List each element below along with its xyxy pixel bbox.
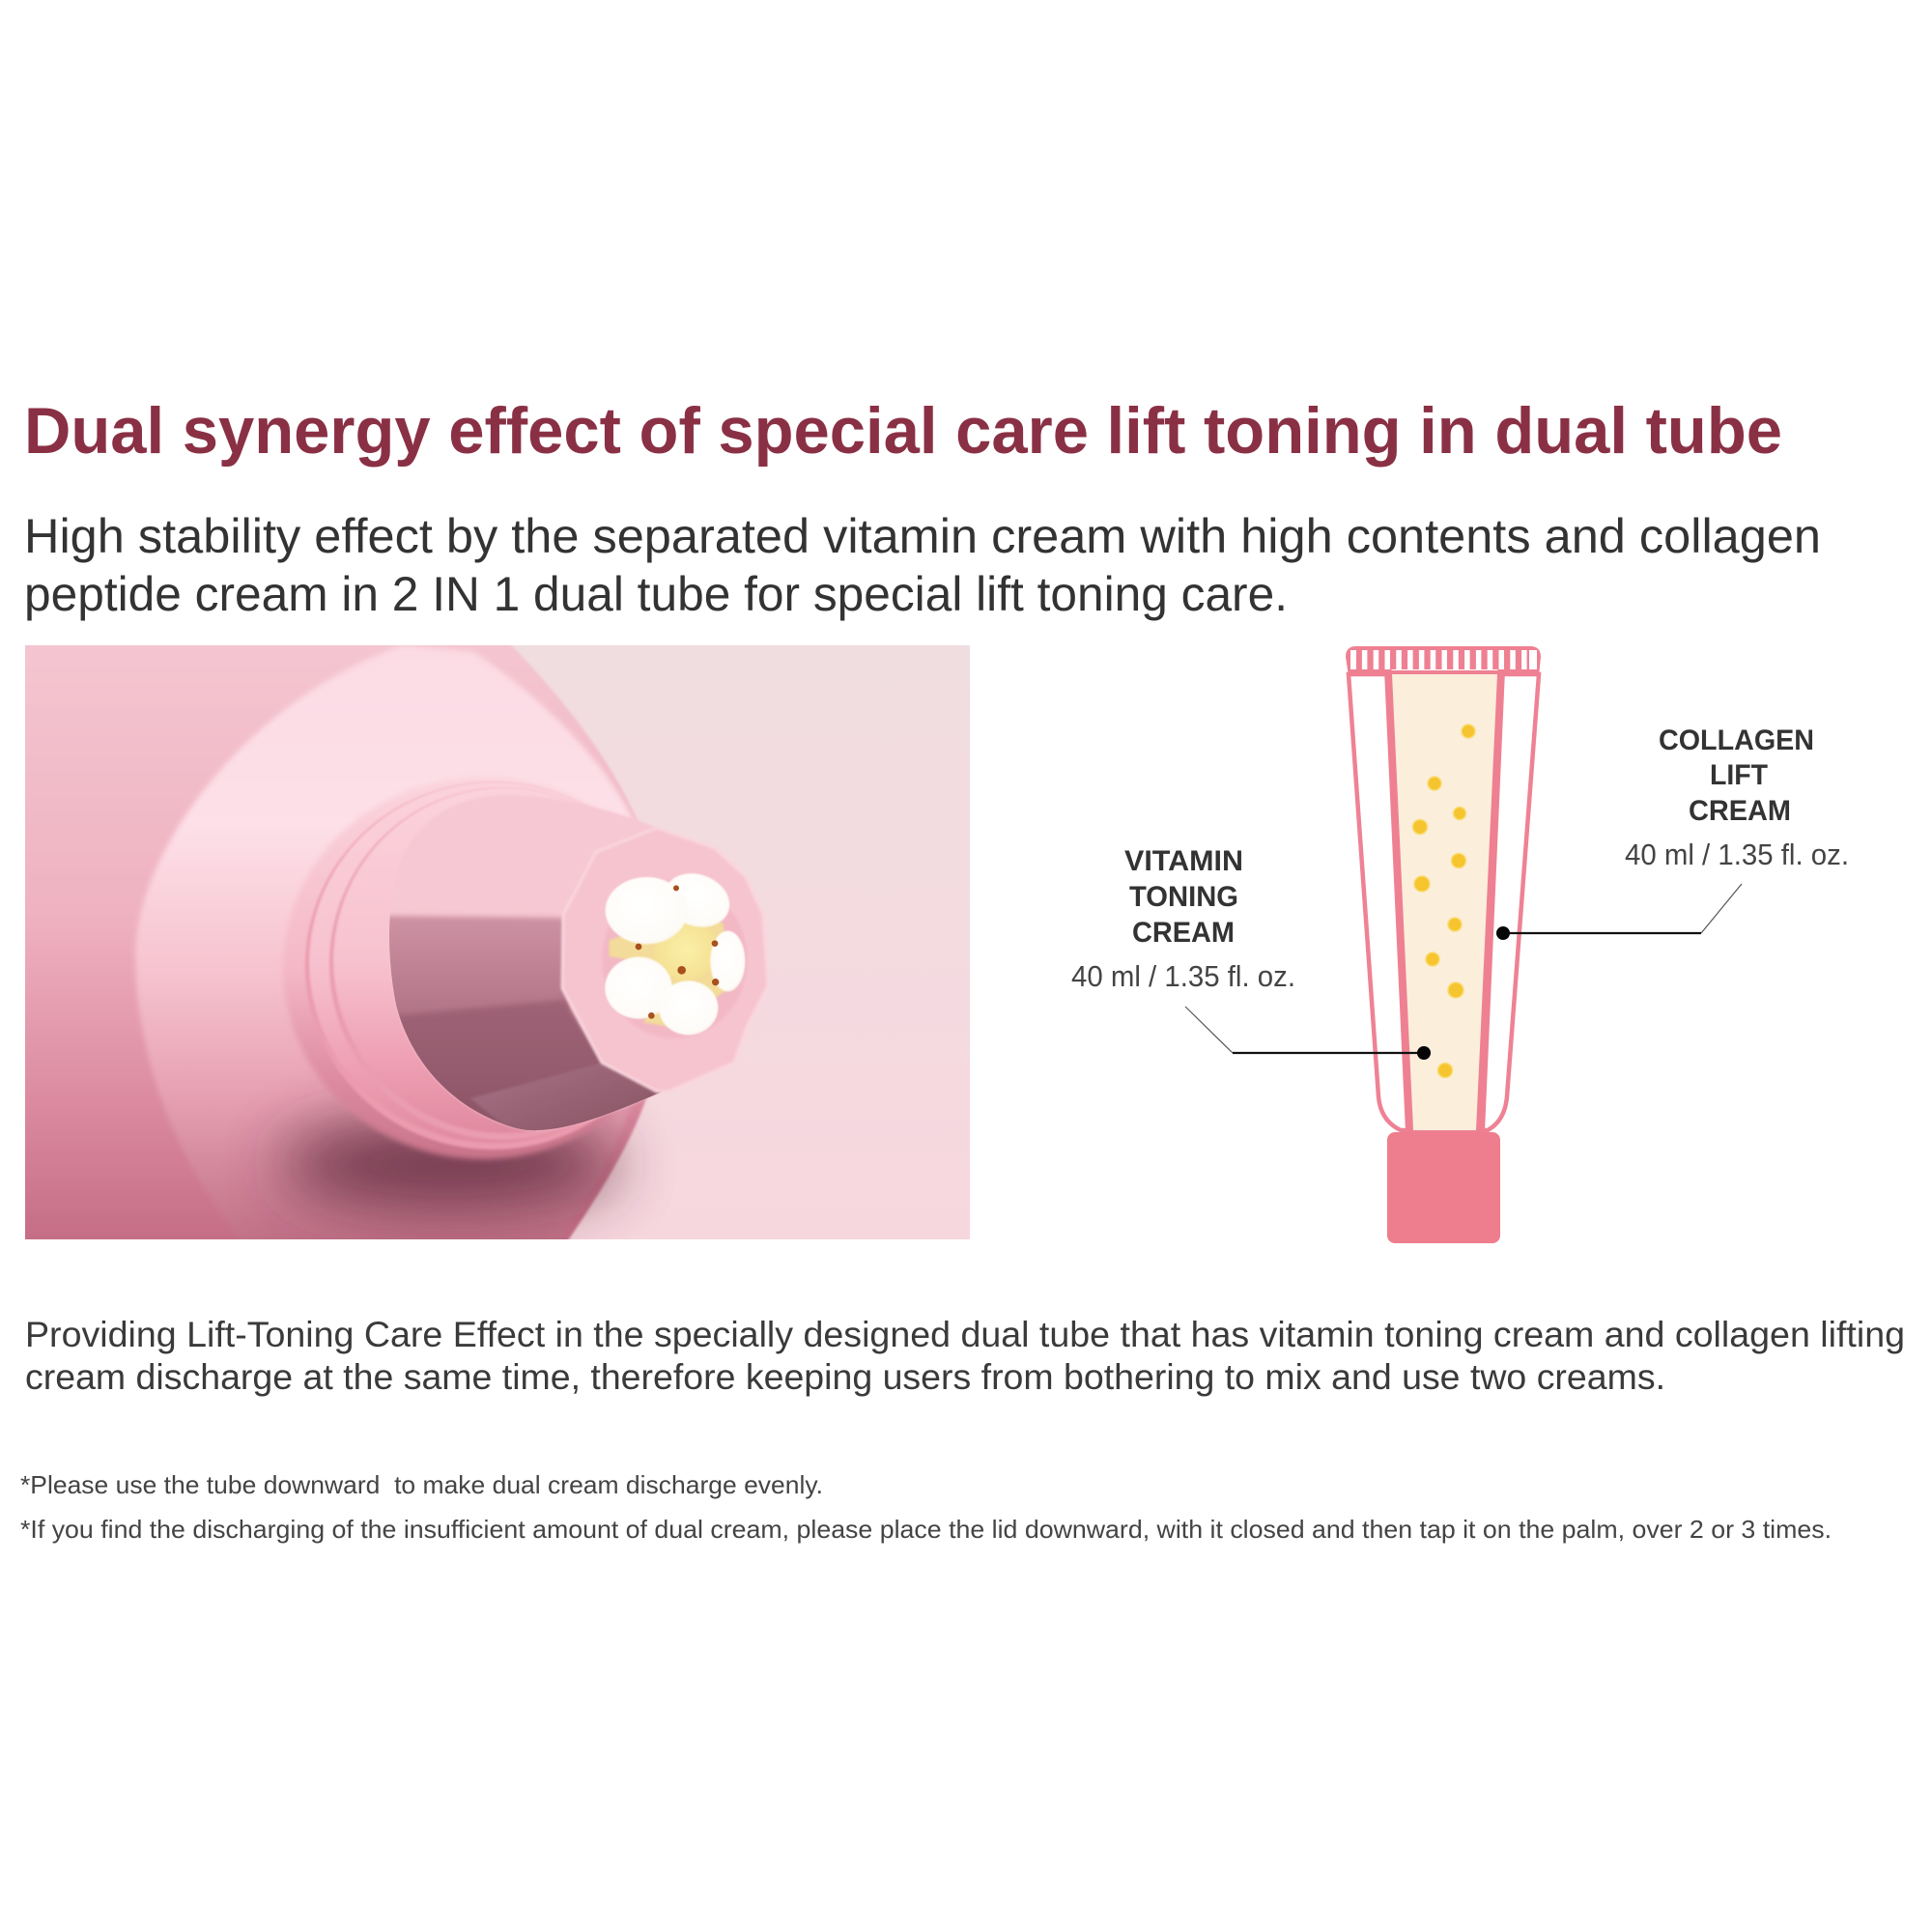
footnotes <box>20 1470 1832 1544</box>
leader: vitamin toning cream <box>1185 1007 1431 1060</box>
ridges around nozzle <box>284 779 611 1163</box>
label: collagen lift cream: COLLAGEN <box>1659 724 1814 756</box>
outer disc <box>19 638 653 1246</box>
label: vitamin toning cream: CREAM <box>1132 917 1235 949</box>
label: vitamin toning cream <box>1071 845 1295 993</box>
tube cap <box>1387 1132 1500 1243</box>
subheading: peptide cream in 2 IN 1 dual tube for special lift toning care. <box>24 567 1288 621</box>
inner disc <box>135 645 639 1246</box>
body paragraph: cream discharge at the same time, therefore keeping users from bothering to mix and use two creams. <box>25 1357 1665 1397</box>
vitamin beads <box>1412 724 1475 1078</box>
label: collagen lift cream: LIFT <box>1710 759 1768 791</box>
label: collagen lift cream: 40 ml / 1.35 fl. oz. <box>1625 838 1849 871</box>
footnotes: *If you find the discharging of the insufficient amount of dual cream, please place the lid downward, with it closed and then tap it on the palm, over 2 or 3 times. <box>20 1515 1832 1544</box>
subheading <box>24 509 1821 621</box>
icon: cream flower at nozzle tip <box>602 865 747 1038</box>
leader: collagen lift cream <box>1496 884 1742 940</box>
tube outer body <box>1349 674 1539 1130</box>
photo: tube nozzle close-up <box>25 645 970 1239</box>
title: Dual synergy effect of special care lift toning in dual tube <box>24 394 1782 468</box>
inner cream chamber <box>1384 670 1505 1132</box>
subheading: High stability effect by the separated vitamin cream with high contents and collagen <box>24 509 1821 563</box>
tube crimp end <box>1346 646 1541 676</box>
label: vitamin toning cream: 40 ml / 1.35 fl. oz. <box>1071 959 1295 993</box>
label: vitamin toning cream: TONING <box>1129 881 1238 913</box>
label: collagen lift cream <box>1625 724 1849 871</box>
body paragraph <box>25 1315 1905 1397</box>
label: vitamin toning cream: VITAMIN <box>1124 845 1243 877</box>
body paragraph: Providing Lift-Toning Care Effect in the specially designed dual tube that has vitamin toning cream and collagen lifting <box>25 1315 1905 1354</box>
nozzle body <box>382 795 671 1140</box>
label: collagen lift cream: CREAM <box>1689 795 1791 827</box>
footnotes: *Please use the tube downward to make dual cream discharge evenly. <box>20 1470 823 1499</box>
tip face <box>562 828 768 1092</box>
shadow under nozzle <box>280 1121 618 1208</box>
